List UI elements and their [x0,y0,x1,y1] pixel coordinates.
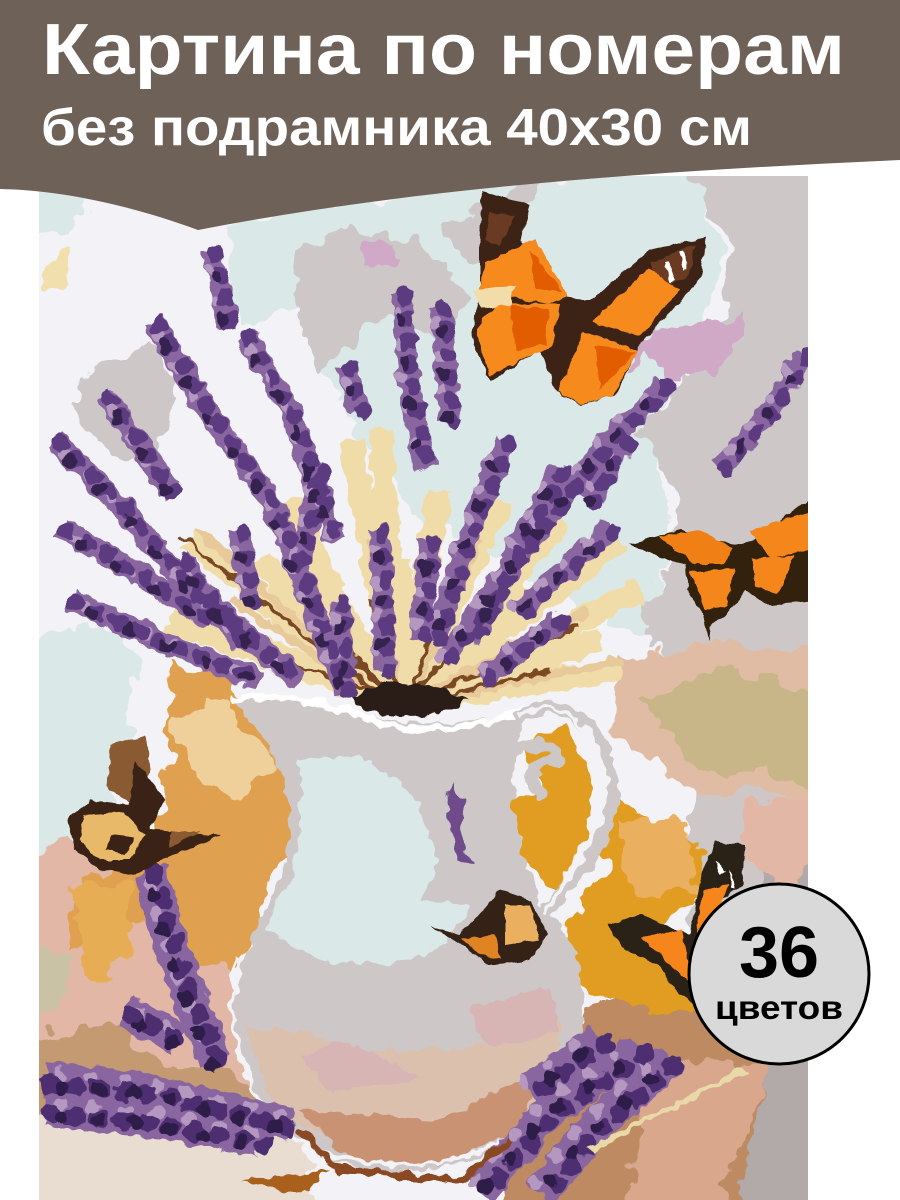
painted background [20,160,830,1200]
butterfly: left [68,735,222,875]
jug highlight [265,755,470,965]
butterfly: right [628,501,808,641]
jug handle [515,708,612,1050]
butterfly: top [470,192,707,405]
badge: 36 colours: 36 [739,913,819,993]
banner [0,0,900,230]
jug [232,697,612,1172]
lower lavender sprigs [38,862,745,1200]
subtitle: без подрамника 40х30 см [41,99,752,157]
title: Картина по номерам [42,10,845,90]
wheat straws [170,430,640,716]
badge: 36 colours [689,884,869,1064]
badge: 36 colours: цветов [715,989,843,1026]
orange background left of jug [60,660,305,970]
butterfly: lower right [607,842,745,1005]
butterfly: small on jug [430,890,548,965]
painting: lavender in a jug with butterflies [20,160,830,1200]
handle inner orange [512,725,595,895]
orange background right of jug [564,799,708,1016]
lavender sprigs [49,247,809,693]
